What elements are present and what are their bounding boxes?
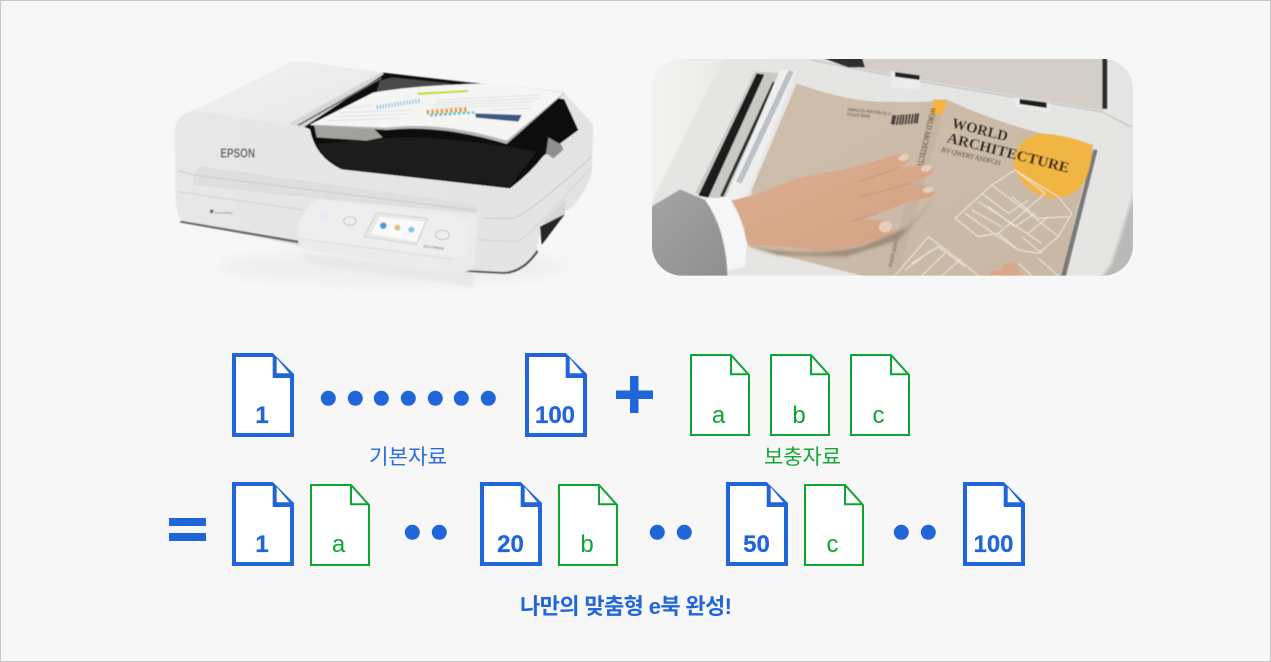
hinge clip middle [890, 71, 920, 89]
control panel shadow [302, 253, 473, 287]
document 100: 100 [535, 402, 575, 429]
document 1: 1 [255, 531, 269, 558]
hinge clip right slot [1020, 99, 1047, 108]
ScanWay label: ScanWay [215, 211, 233, 215]
document c: c [872, 402, 884, 429]
cover title line two: ARCHITECTURE [945, 130, 1071, 177]
light blue icon [408, 227, 414, 233]
document 50 [726, 482, 788, 566]
side recess [542, 200, 565, 223]
document 1 [232, 353, 294, 437]
feeder roller cover [377, 77, 453, 92]
barcode [892, 113, 918, 125]
start button [435, 230, 449, 240]
dark gap under right side [540, 214, 565, 245]
output tray [317, 137, 537, 187]
scanner body [175, 62, 593, 273]
book page edge [1060, 149, 1098, 280]
ScanWay mark [210, 209, 214, 213]
dots [650, 525, 692, 540]
paper side clip [546, 137, 563, 158]
glass frame left [695, 72, 785, 200]
document a [691, 355, 749, 435]
hand silhouette [728, 154, 934, 250]
paper guide [314, 125, 383, 141]
row one: basic materials [232, 353, 587, 437]
architecture line drawing [895, 170, 1072, 276]
front slot recess [193, 167, 477, 213]
label: basic materials: 기본자료 [369, 446, 447, 469]
black glass slit [698, 73, 764, 198]
book [748, 83, 1098, 280]
touch screen [371, 217, 425, 242]
document 20 [480, 482, 542, 566]
row two: merged documents [232, 482, 1025, 566]
power button [319, 213, 329, 222]
thin black slit [720, 82, 776, 197]
control panel [298, 199, 478, 272]
scanned document [310, 83, 565, 144]
lid hinge left [824, 59, 866, 68]
tan icon [394, 225, 400, 231]
feeder lid dark line [298, 78, 381, 125]
equals sign [169, 518, 206, 541]
document a: a [332, 531, 346, 558]
blue bar chart [377, 101, 420, 107]
document 50: 50 [743, 531, 770, 558]
document c [805, 485, 863, 565]
scanner bed background [667, 59, 724, 168]
document b: b [580, 531, 594, 558]
model name: DS-1760WN [423, 244, 444, 251]
hand shadow [752, 214, 922, 258]
feeder lid edge strip [288, 73, 384, 127]
automatic feeder lid [193, 62, 383, 126]
scanner frame [652, 59, 1108, 264]
scanner floor shadow [220, 248, 567, 285]
label: supplementary materials: 보충자료 [764, 446, 841, 469]
document b [559, 485, 617, 565]
shirt cuff [705, 197, 747, 271]
base shadow right [465, 250, 538, 274]
green heading on document [417, 90, 468, 95]
result caption: 나만의 맞춤형 e북 완성! [520, 594, 732, 619]
lower body seam [178, 167, 592, 242]
document 20: 20 [497, 531, 524, 558]
document picture [475, 113, 522, 122]
panel body [298, 199, 478, 272]
ISBN text two: XX123 0000 [846, 111, 871, 119]
dots [894, 525, 936, 540]
author: BY QWERT ASDFGH [941, 146, 1001, 167]
document page edge [310, 83, 565, 144]
ISBN text: ISBN123-456789-01-2 [847, 107, 891, 116]
hand [728, 153, 934, 250]
lid edge line [812, 60, 1132, 127]
orange blob [1014, 133, 1092, 198]
document 100 [525, 353, 587, 437]
spine title: WORLD ARCHITECTU [915, 107, 938, 169]
touch screen bezel [364, 213, 428, 245]
row one: supplementary materials [691, 355, 909, 435]
screen icons [380, 222, 414, 233]
book scanning photo [648, 57, 1135, 280]
document 100 [963, 482, 1025, 566]
document 1: 1 [255, 402, 269, 429]
orange and teal chart [427, 109, 474, 115]
document c [851, 355, 909, 435]
document 100: 100 [973, 531, 1014, 558]
cover title: WORLD [950, 116, 1010, 145]
suit sleeve [648, 189, 728, 280]
front body line [178, 157, 592, 218]
document text lines [327, 95, 540, 121]
dots [321, 391, 496, 406]
document a: a [712, 402, 726, 429]
hinge clip right [1013, 97, 1050, 112]
second hand fingertips [989, 262, 1024, 276]
right frame shadow [1102, 194, 1133, 276]
document b [771, 355, 829, 435]
open lid underside [858, 57, 1102, 111]
scanner product photo [175, 62, 593, 287]
book cover [748, 83, 1093, 280]
spine author: BY QWERT ASDFGH [886, 234, 900, 267]
document output opening [300, 73, 578, 188]
document 1 [232, 482, 294, 566]
dots [405, 525, 447, 540]
document b: b [792, 402, 806, 429]
EPSON logo: EPSON [220, 146, 255, 160]
finger creases [852, 167, 912, 222]
fingernails [878, 153, 934, 233]
spine shade [921, 100, 944, 160]
right lid edge [1102, 57, 1107, 109]
document a [311, 485, 369, 565]
spine label [930, 99, 947, 115]
hinge clip middle slot [895, 72, 920, 80]
document c: c [826, 531, 838, 558]
base shadow left [180, 221, 298, 243]
rail blue strip [736, 71, 794, 183]
white rail [725, 70, 797, 200]
plus sign [616, 376, 653, 413]
home button [344, 217, 356, 225]
blue icon [380, 222, 387, 229]
document top surface [310, 83, 564, 141]
panel face edge [298, 238, 453, 259]
panel face [298, 200, 472, 256]
photo contents [648, 57, 1135, 280]
